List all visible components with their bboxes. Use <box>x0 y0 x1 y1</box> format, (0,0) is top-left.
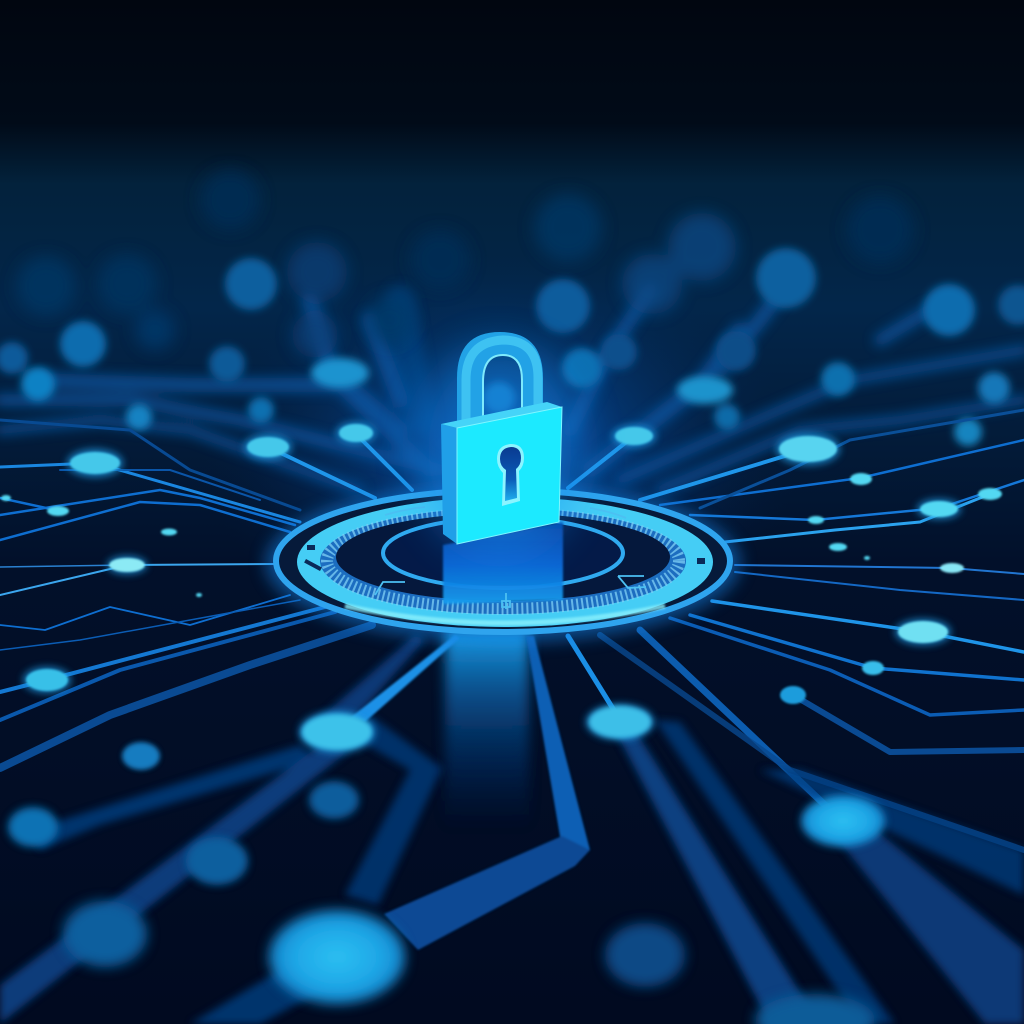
lock reflection <box>443 522 563 604</box>
platform glow <box>265 483 741 643</box>
ring markings <box>375 507 646 609</box>
band tiny marks <box>304 545 705 571</box>
lock body top <box>441 402 562 428</box>
tick band base <box>320 508 686 614</box>
light beam below platform <box>445 628 529 828</box>
shackle inner highlight <box>483 355 522 421</box>
medium soft nodes <box>122 706 651 770</box>
bright node cores <box>1 424 1002 704</box>
inner ring <box>383 518 623 588</box>
nodes: sharp bright <box>1 422 1002 1024</box>
sharp circuit traces: right side <box>568 410 1024 850</box>
sharp circuit traces: bottom centre <box>350 635 590 950</box>
outer thin ring <box>276 490 730 632</box>
cyan band <box>297 497 713 627</box>
padlock <box>415 332 585 555</box>
platform ring <box>265 483 741 643</box>
keyhole rim <box>497 444 524 506</box>
blurred near traces <box>0 635 1024 1024</box>
lock body front <box>457 407 562 544</box>
far blurred nodes: middle row <box>0 248 1024 446</box>
background: central glow <box>200 250 800 650</box>
large near nodes <box>8 781 885 885</box>
tick band marks <box>327 513 679 609</box>
dark inner disc <box>336 513 670 601</box>
shackle body <box>457 332 543 425</box>
far blurred circuit traces <box>0 280 1024 490</box>
node halos <box>23 422 961 753</box>
keyhole opening <box>500 447 521 501</box>
far blurred nodes: distant row <box>16 170 914 358</box>
keyhole <box>497 444 524 506</box>
shackle face <box>466 340 538 423</box>
sharp circuit traces: left side <box>0 420 412 768</box>
bright band front highlight <box>345 606 665 623</box>
shackle <box>457 332 543 425</box>
largest blurred nodes <box>63 901 875 1024</box>
lock body side <box>441 424 457 544</box>
padlock glow <box>415 345 585 555</box>
